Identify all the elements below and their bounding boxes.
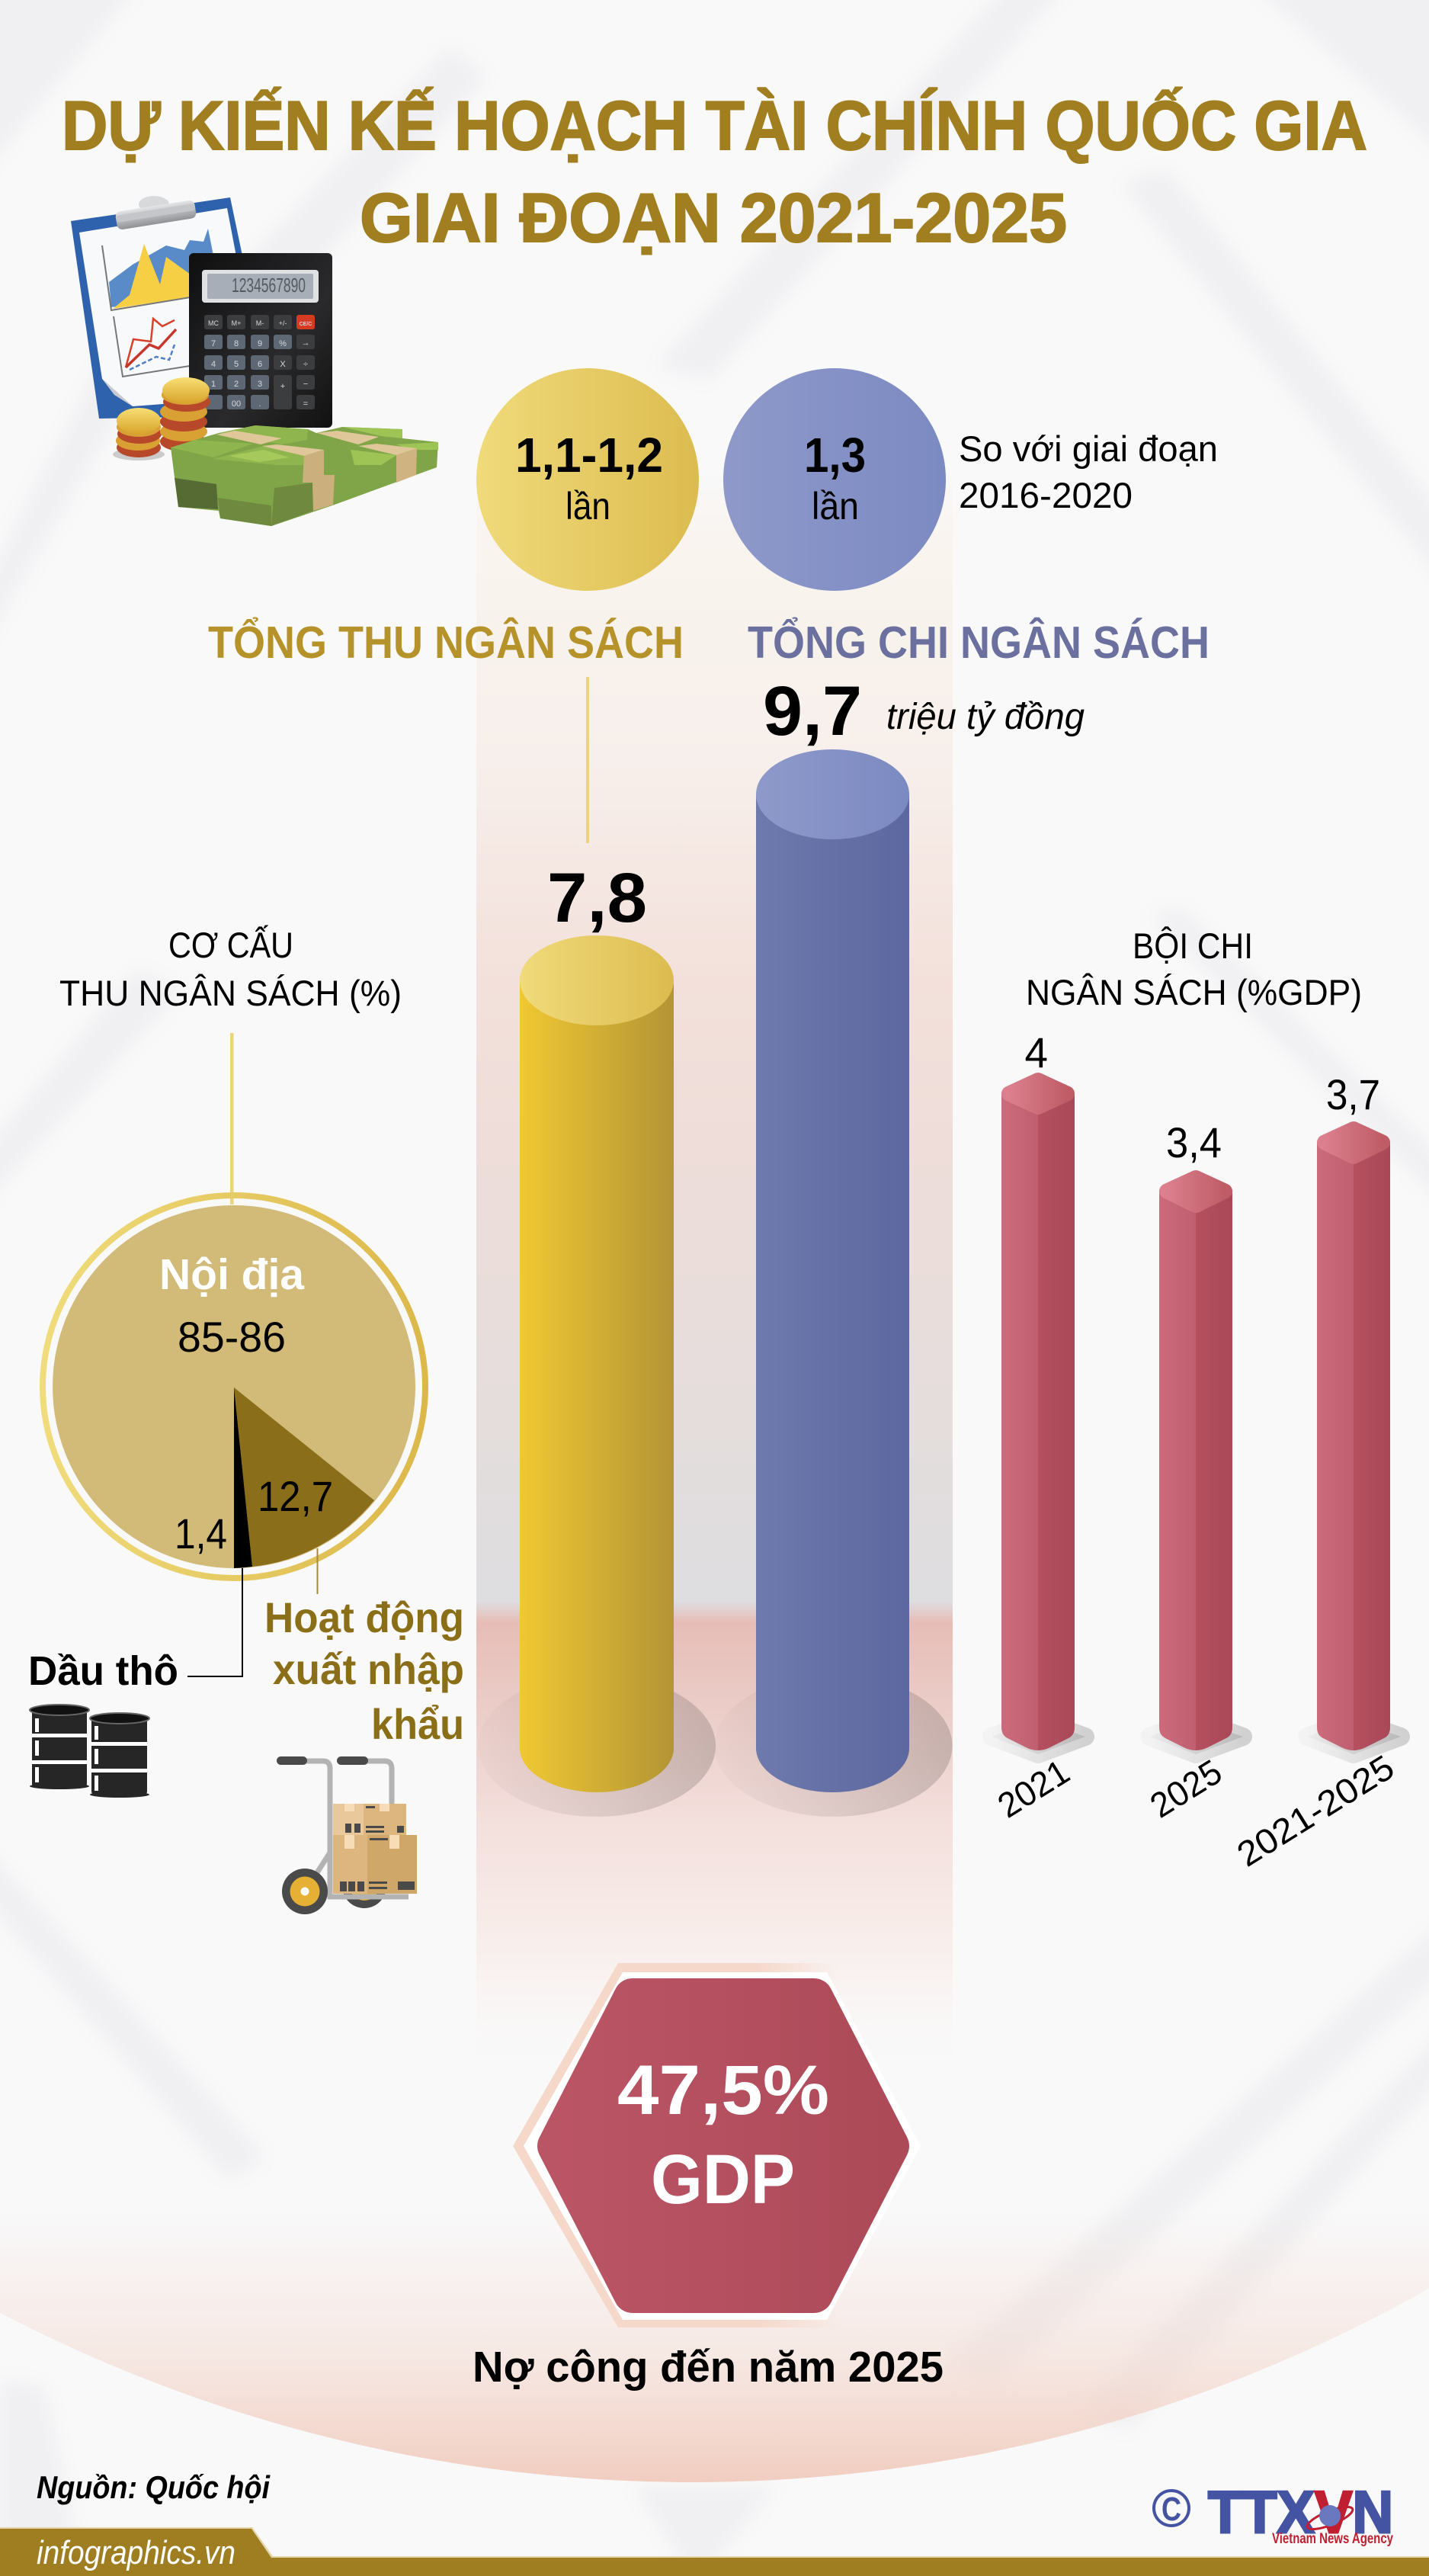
note: compared with 2016-2020: 2016-2020 xyxy=(959,475,1133,515)
pie chart: revenue structure: 1,4 xyxy=(175,1509,227,1557)
bar: 2021 value 4 xyxy=(992,1028,1085,1754)
heading: total expenditure: TỔNG CHI NGÂN SÁCH xyxy=(748,617,1210,668)
connector: heading to pie xyxy=(230,1033,233,1205)
hexagon: public debt 47,5% GDP xyxy=(513,1963,921,2327)
title: GIAI ĐOẠN 2021-2025 xyxy=(360,180,1067,257)
calculator: → xyxy=(302,338,309,348)
calculator: = xyxy=(303,399,308,409)
bar chart: budget deficit xyxy=(991,1028,1401,1874)
axis labels: 2021 xyxy=(991,1751,1076,1825)
source: Nguồn: Quốc hội xyxy=(37,2469,271,2506)
calculator: 8 xyxy=(234,339,239,348)
calculator: M+ xyxy=(232,319,241,327)
calculator: 7 xyxy=(211,339,216,348)
calculator: MC xyxy=(208,319,219,327)
circle: revenue multiple: lần xyxy=(566,485,610,528)
calculator: 1 xyxy=(211,380,216,389)
note: compared with 2016-2020 xyxy=(959,428,1218,515)
calculator: + xyxy=(280,382,285,391)
bar: 2021-2025 value 3,7 xyxy=(1307,1070,1401,1754)
heading: revenue structure: THU NGÂN SÁCH (%) xyxy=(59,973,402,1013)
calculator: 00 xyxy=(232,399,241,409)
calculator: M- xyxy=(256,319,264,327)
connector: revenue heading to cylinder xyxy=(586,677,589,843)
heading: budget deficit: BỘI CHI xyxy=(1133,925,1253,966)
pie chart: revenue structure: Nội địa xyxy=(159,1250,305,1299)
callout: import-export xyxy=(264,1548,464,1748)
logo: TTXVN: TTXVN xyxy=(1208,2478,1393,2546)
heading: budget deficit xyxy=(1026,925,1362,1012)
axis labels: 2025 xyxy=(1143,1751,1229,1825)
icon: clipboard, calculator, coins and money xyxy=(71,196,438,526)
bar: 2021 value 4: 4 xyxy=(1024,1028,1048,1076)
cylinder: revenue 7,8: 7,8 xyxy=(547,859,647,937)
axis labels: 2021-2025 xyxy=(1230,1747,1401,1874)
footer bar: infographics.vn xyxy=(37,2534,235,2571)
callout: crude oil: Dầu thô xyxy=(28,1648,178,1694)
calculator: 6 xyxy=(258,360,262,369)
hexagon: public debt 47,5% GDP: GDP xyxy=(651,2141,795,2218)
calculator: 9 xyxy=(258,339,262,348)
clipboard xyxy=(71,196,276,419)
callout: import-export: xuất nhập xyxy=(273,1645,464,1693)
logo: TTXVN: Vietnam News Agency xyxy=(1272,2531,1393,2547)
calculator: % xyxy=(279,339,287,348)
circle: expenditure multiple: 1,3 xyxy=(804,428,866,483)
money stacks xyxy=(171,425,438,526)
callout: import-export: khẩu xyxy=(371,1700,464,1748)
coins xyxy=(113,377,210,460)
cylinder: expenditure 9,7: 9,7 xyxy=(763,672,862,750)
heading: revenue structure: CƠ CẤU xyxy=(168,925,293,965)
cylinder: revenue 7,8 xyxy=(478,859,716,1817)
pie chart: revenue structure: 12,7 xyxy=(258,1472,333,1520)
note: compared with 2016-2020: So với giai đoạn xyxy=(959,428,1218,469)
calculator xyxy=(189,253,332,428)
calculator: +/- xyxy=(279,319,287,327)
calculator: − xyxy=(303,380,308,389)
calculator: 3 xyxy=(258,380,262,389)
logo: TTXVN: C xyxy=(1161,2491,1181,2528)
pie chart: revenue structure xyxy=(43,1195,425,1578)
pale column behind cylinders xyxy=(476,473,953,2074)
cylinder: expenditure 9,7: triệu tỷ đồng xyxy=(886,697,1085,737)
bar: 2025 value 3,4: 3,4 xyxy=(1166,1118,1222,1166)
heading: total revenue: TỔNG THU NGÂN SÁCH xyxy=(208,617,684,668)
calculator: 2 xyxy=(234,380,239,389)
calculator: X xyxy=(280,360,286,369)
axis labels xyxy=(991,1747,1401,1874)
circle: revenue multiple xyxy=(476,368,699,591)
caption: public debt by 2025: Nợ công đến năm 2025 xyxy=(473,2343,944,2392)
calculator: . xyxy=(258,399,261,409)
calculator: ÷ xyxy=(303,360,308,369)
circle: expenditure multiple xyxy=(723,368,946,591)
heading: revenue structure xyxy=(59,925,402,1013)
icon: oil barrels xyxy=(30,1705,149,1798)
footer bar xyxy=(0,2527,1429,2576)
callout: import-export: Hoạt động xyxy=(264,1593,464,1641)
bar: 2025 value 3,4 xyxy=(1149,1118,1243,1754)
calculator: CE/C xyxy=(300,322,312,327)
icon: hand truck with boxes xyxy=(277,1756,417,1914)
circle: expenditure multiple: lần xyxy=(812,485,859,528)
calculator: 1234567890 xyxy=(232,274,306,297)
callout: crude oil xyxy=(28,1568,242,1694)
cylinder: expenditure 9,7 xyxy=(715,672,1085,1817)
bar: 2021-2025 value 3,7: 3,7 xyxy=(1326,1070,1380,1118)
title xyxy=(62,87,1367,257)
circle: revenue multiple: 1,1-1,2 xyxy=(515,428,663,483)
calculator: 5 xyxy=(234,360,239,369)
calculator: 4 xyxy=(211,360,216,369)
heading: budget deficit: NGÂN SÁCH (%GDP) xyxy=(1026,972,1362,1012)
hexagon: public debt 47,5% GDP: 47,5% xyxy=(617,2051,829,2129)
pie chart: revenue structure: 85-86 xyxy=(178,1313,286,1361)
